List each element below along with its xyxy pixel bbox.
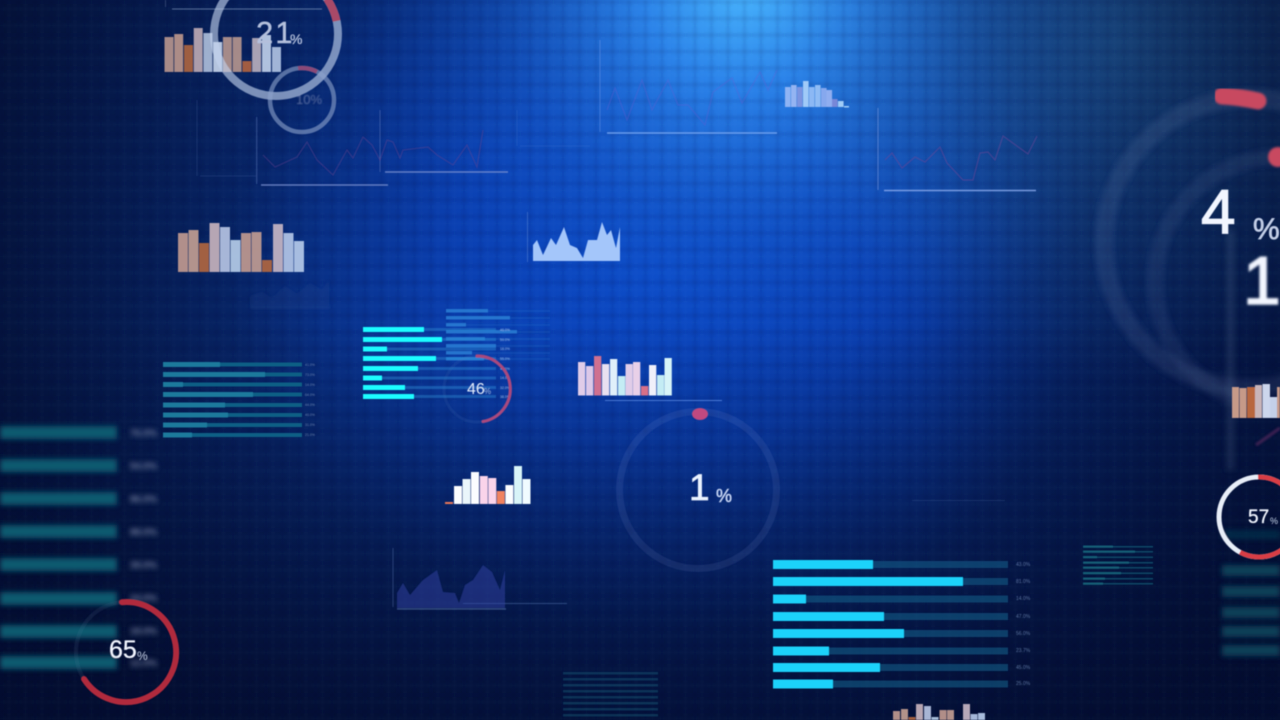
large blurred left bars: 86.0% (130, 494, 157, 505)
large blurred left bars: 76.0% (130, 428, 157, 439)
cyan bar list: centre: 38.0% (500, 395, 510, 399)
teal bar list: 41.0% (305, 363, 315, 367)
cyan bar list: centre: 18.0% (500, 347, 510, 351)
ring gauge: 65%: % (137, 649, 148, 663)
cyan bar list: centre: 41.0% (500, 367, 510, 371)
cyan bar list: centre: 14.0% (500, 376, 510, 380)
ring gauge: 21% (214, 0, 338, 96)
ring gauge: 46%: 46 (467, 381, 485, 398)
ring gauge: 57%: % (1270, 516, 1278, 526)
bar chart: bottom edge (893, 704, 985, 720)
cyan bar list: lower right: 47.0% (1016, 614, 1031, 620)
cyan bar list: lower right: 25.0% (1016, 681, 1031, 687)
bar chart: centre pastel (578, 356, 672, 396)
cyan bar list: lower right: 43.0% (1016, 562, 1031, 568)
teal bar list: 46.0% (305, 413, 315, 417)
cyan bar list: centre (363, 327, 510, 399)
teal bar list: 14.0% (305, 383, 315, 387)
ring gauge: 10%: 10% (296, 92, 322, 107)
cyan bar list: centre: 59.0% (500, 338, 510, 342)
cyan bar list: centre: 32.0% (500, 386, 510, 390)
blue bar list overlay (446, 309, 550, 360)
bar chart: right edge (1232, 384, 1280, 418)
big percent readout: 4%: 4 (1201, 178, 1235, 247)
teal bar list: 21.0% (305, 433, 315, 437)
big percent readout: 4%: % (1253, 213, 1280, 246)
ring gauge: 46% (444, 356, 510, 422)
ring gauge: 1% (620, 408, 776, 568)
ring gauge: 1%: 1 (689, 467, 710, 508)
faint area chart: lower centre (393, 548, 567, 609)
bar chart: upper left second (178, 223, 304, 272)
teal bar list: 73.0% (305, 373, 315, 377)
big percent readout: 4% (1201, 178, 1280, 247)
ring gauge: 65%: 65 (109, 636, 137, 664)
cyan bar list: lower right: 45.0% (1016, 665, 1031, 671)
faint rule: lower centre (912, 500, 1005, 502)
line chart: upper right (878, 108, 1037, 190)
ring gauge: 65% (76, 602, 176, 702)
faint detail chart: top centre (517, 110, 590, 146)
ring gauge: 46%: % (484, 387, 491, 396)
cyan bar list: lower right: 23.7% (1016, 648, 1031, 654)
large blurred left bars: 88.0% (130, 527, 157, 538)
large blurred left bars (0, 426, 157, 669)
bar chart: white and pink (445, 466, 530, 504)
cyan bar list: centre: 46.0% (500, 328, 510, 332)
ring gauge: 57% (1219, 477, 1280, 557)
ring gauge: 57%: 57 (1248, 507, 1269, 528)
teal bar list: 44.0% (305, 403, 315, 407)
cyan bar list: centre: 55.0% (500, 357, 510, 361)
large blurred left bars: 12.0% (130, 658, 157, 669)
large blurred left bars: 39.0% (130, 560, 157, 571)
blurred right bars (1222, 530, 1280, 656)
ring gauge: 21%: 21 (256, 15, 294, 50)
big blurred rings: upper right (1104, 98, 1280, 470)
rule line under pastel chart (605, 400, 722, 402)
teal bar list (163, 362, 315, 438)
ring gauge: 21%: % (290, 31, 302, 47)
large blurred left bars: 54.0% (130, 461, 157, 472)
cyan bar list: lower right (773, 560, 1031, 688)
small teal bar list: right (1083, 546, 1153, 585)
bar chart: top right small (785, 81, 849, 108)
faint rule lines: top left (166, 0, 322, 9)
cyan bar list: lower right: 56.0% (1016, 631, 1031, 637)
red arc markers: upper right (1222, 96, 1280, 167)
line chart: upper centre (600, 40, 777, 133)
teal bar list: 64.0% (305, 393, 315, 397)
faint bar list: bottom centre (563, 672, 658, 716)
large blurred left bars: 24.0% (130, 593, 157, 604)
bar chart: top left (164, 28, 281, 72)
ring gauge: 10% (270, 68, 334, 132)
cyan bar list: lower right: 81.0% (1016, 579, 1031, 585)
cyan bar list: lower right: 14.0% (1016, 596, 1031, 602)
ring gauge: 1%: % (716, 486, 732, 506)
faint red streak: right (1256, 428, 1280, 445)
teal bar list: 31.0% (305, 423, 315, 427)
large blurred left bars: 18.0% (130, 626, 157, 637)
area chart: light blue (528, 212, 620, 262)
line chart: upper left pair (197, 100, 508, 185)
faint area chart: left (250, 280, 330, 308)
